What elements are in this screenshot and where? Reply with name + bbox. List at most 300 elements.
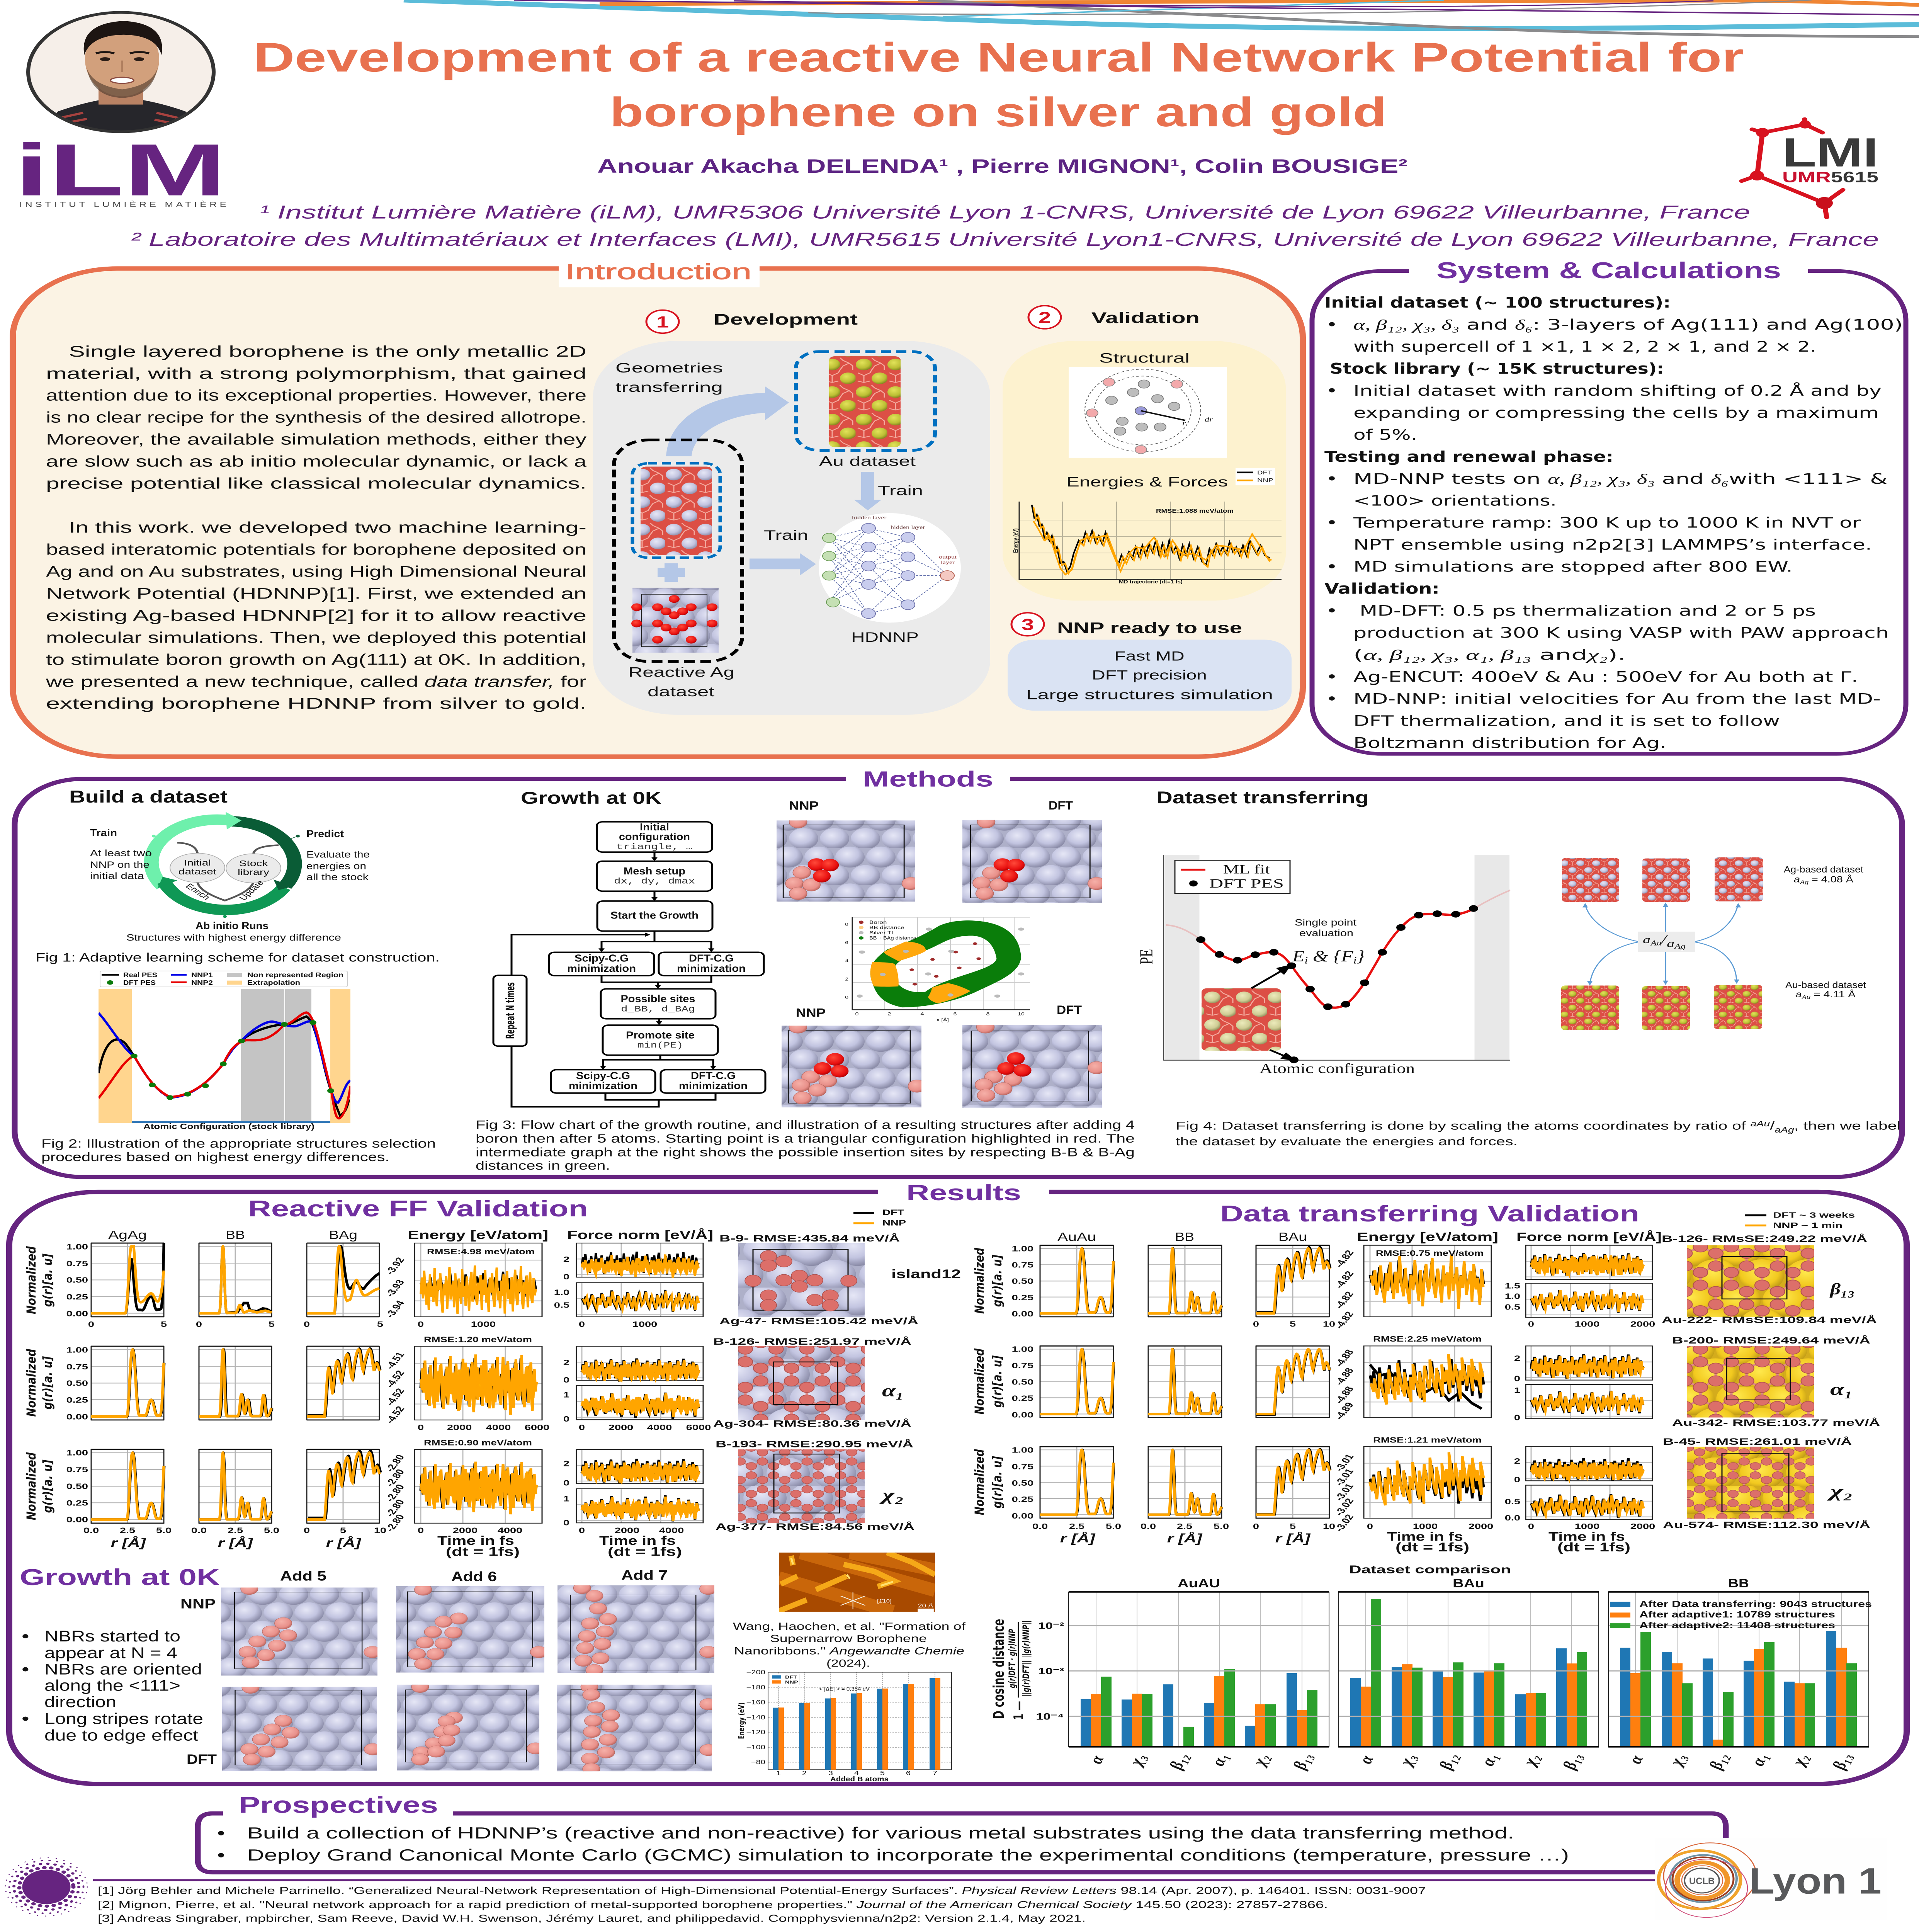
chart row: data transfer, chi2: 1000 [1575,1522,1599,1531]
affiliations: ² Laboratoire des Multimatériaux et Interfaces (LMI), UMR5615 Université Lyon1-CNRS, Université de Lyon 69622 Villeurbanne, France [131,229,1879,250]
chart row: data transfer, chi2: 0.25 [1012,1495,1033,1504]
axis labels: (dt = 1fs) [1395,1541,1469,1554]
axis labels: r [Å] [111,1536,146,1550]
panel: NNP benefits: Large structures simulation [1026,687,1273,702]
y axis label: 10⁻² [1038,1621,1064,1631]
chart row: reactive FF, chi2: 0 [418,1526,424,1535]
chart row: reactive FF, chi2: 0.0 [83,1526,99,1535]
arrow: train down: Train [878,483,923,498]
sub-heading: dataset transferring: Dataset transferring [1156,788,1369,807]
bar chart: energy vs added B atoms: −180 [746,1684,765,1691]
chart row: data transfer, chi2: 2.5 [1069,1522,1084,1531]
chart row: reactive FF, chi2: 0.0 [191,1526,207,1535]
chart row: reactive FF, chi2: 2.5 [120,1526,135,1535]
introduction body text: are slow such as ab initio molecular dynamic, or lack a [46,453,587,470]
legend [770,1674,799,1685]
chart row: data transfer, beta13: 0 [1528,1320,1534,1328]
bar chart: energy vs added B atoms: 3 [828,1770,833,1777]
chart row: data transfer, chi2: 0 [1514,1475,1520,1484]
body text: NPT ensemble using n2p2[3] LAMMPS’s interface. [1353,536,1872,553]
heading: methods: Methods [863,767,993,791]
atomistic structure: island12 on Ag: B-9- RMSE:435.84 meV/Å [719,1233,900,1244]
chart row: reactive FF, alpha1: 2 [563,1358,569,1367]
chart row: reactive FF, island12: 0 [304,1320,310,1329]
introduction body text: existing Ag-based HDNNP[2] for it to allow reactive [46,607,586,624]
legend: BB + BAg distance [869,936,916,941]
axis labels: Time in fs [1387,1530,1463,1544]
axis labels: Time in fs [437,1534,514,1548]
flow chart: growth routine: min(PE) [637,1041,683,1050]
chart row: data transfer, chi2: 0 [1528,1522,1534,1531]
bar chart: energy vs added B atoms: 2 [802,1770,807,1777]
atomistic structure: chi2 on Ag [716,1439,914,1532]
chart row: reactive FF, alpha1: RMSE:1.20 meV/atom [424,1335,532,1344]
chart row: reactive FF, island12: -3.93 [383,1278,407,1298]
bullet text: growth observations: NBRs are oriented [44,1661,202,1678]
body text: • [1326,514,1338,531]
chart row: data transfer, beta13: 1.00 [1012,1244,1033,1253]
atomistic structure: island12 on Ag: Ag-47- RMSE:105.42 meV/Å [719,1316,918,1327]
arrows to the curve [1251,966,1294,1060]
data transfer thumbnails and scaling diagram: Ag-based dataset [1784,864,1863,874]
flow chart: growth routine: triangle, … [616,842,693,852]
legend [1175,861,1290,893]
panel chart: BB [1608,1577,1872,1772]
chart row: reactive FF, chi2: 0 [304,1526,310,1535]
introduction body text: precise potential like classical molecular dynamics. [46,475,586,492]
chart row: reactive FF, alpha1: Normalized [24,1349,39,1417]
chart: possible insertion sites map: 10 [1018,1011,1025,1016]
bar chart: energy vs added B atoms: −120 [746,1729,765,1736]
chart row: data transfer, alpha1: Normalized [972,1348,987,1415]
introduction body text [46,343,587,712]
panel chart: AuAU: α₁ [1208,1752,1232,1768]
column titles: reactive FF [108,1228,713,1242]
affiliations [131,202,1879,250]
body text: Temperature ramp: 300 K up to 1000 K in NVT or [1353,514,1861,531]
sub-heading: reactive FF validation: Reactive FF Validation [248,1196,588,1221]
image: STM of borophene nanoribbons: 20 Å [918,1602,933,1609]
caption: figure 4: , then we label [1794,1119,1900,1132]
flow chart: growth routine: Scipy-C.G [575,953,629,964]
atomistic structure: beta13 on Au: Au-222- RMsSE:109.84 meV/Å [1662,1315,1877,1325]
caption: figure 4: aAu [1751,1120,1770,1128]
decorative header swooshes [404,0,1919,37]
chart row: data transfer, chi2: RMSE:1.21 meV/atom [1373,1436,1482,1444]
flow chart: growth routine: dx, dy, dmax [614,876,695,886]
legend: NNP [1257,477,1273,483]
atomistic structure: alpha1 on Ag: α₁ [882,1381,904,1400]
body text: of 5%. [1353,426,1417,443]
bar chart: energy vs added B atoms: −160 [746,1699,765,1706]
column titles: data transferring: Energy [eV/atom] [1357,1230,1498,1244]
bar chart: dataset comparison [990,1564,1872,1772]
body text: MD-NNP tests on α, β₁₂, χ₃, δ₃ and δ₆with <111> & [1353,470,1887,487]
data transfer thumbnails and scaling diagram: Ag [1800,879,1809,885]
legend: DFT PES [1209,876,1284,890]
chart: PES with ML fit and DFT points: i [1304,955,1308,966]
chart: PES with ML fit and DFT points: i [1353,955,1356,966]
body text: Ag-ENCUT: 400eV & Au : 500eV for Au both at Γ. [1353,668,1858,685]
chart row: data transfer, alpha1: g(r)[a. u] [990,1355,1005,1408]
Au dataset structure [796,352,935,451]
bar chart: energy vs added B atoms [738,1669,952,1783]
y axis label: 1 — [1011,1701,1026,1720]
chart row: data transfer, beta13: 0.00 [1012,1310,1033,1318]
body text: DFT thermalization, and it is set to follow [1353,713,1780,729]
chart row: data transfer, chi2: 2.5 [1177,1522,1192,1531]
chart row: data transfer, alpha1 [972,1335,1652,1422]
chart row: reactive FF, alpha1: 0 [579,1423,585,1432]
body text: Validation: [1324,580,1440,597]
bar chart: dataset comparison: Dataset comparison [1349,1564,1511,1576]
axis labels [1060,1530,1630,1554]
atomistic structure: chi2 on Au: B-45- RMSE:261.01 meV/Å [1663,1437,1852,1447]
image: STM of borophene nanoribbons: [1̄10] [877,1599,892,1604]
label: Au dataset: Au dataset [819,454,916,469]
chart row: reactive FF, alpha1: -4.52 [383,1387,407,1407]
title [253,34,1744,135]
adaptive learning cycle diagram [90,812,370,943]
chart: possible insertion sites map: 4 [921,1011,924,1016]
chart: possible insertion sites map: 8 [845,922,848,927]
flow chart: growth routine: configuration [619,831,690,842]
chart row: reactive FF, alpha1: 6000 [686,1423,711,1432]
chart row: data transfer, beta13: 0 [1253,1320,1259,1328]
column titles: reactive FF: Force norm [eV/Å] [567,1228,713,1242]
flow chart: growth routine: Promote site [626,1029,695,1041]
chart row: reactive FF, island12: 0.00 [66,1309,88,1318]
body text: MD simulations are stopped after 800 EW. [1353,558,1793,575]
chart row: reactive FF, chi2: 0 [579,1526,585,1535]
bullet text: growth observations: Long stripes rotate [44,1710,203,1728]
line chart: energies [1012,502,1282,585]
caption: figure 3: Fig 3: Flow chart of the growth routine, and illustration of a resulting structures after adding 4 [476,1118,1135,1132]
chart row: reactive FF, island12: 1000 [471,1320,496,1329]
HDNNP network diagram: hidden layer [852,515,887,520]
chart row: reactive FF, island12: Normalized [24,1246,39,1314]
chart row: data transfer, beta13: 1000 [1575,1320,1599,1328]
citation: Wang et al.: Wang, Haochen, et al. "Formation of [733,1621,966,1632]
introduction body text: to stimulate boron growth on Ag(111) at 0K. In addition, [46,651,586,668]
introduction body text: is no clear recipe for the synthesis of the desired allotrope. [46,409,586,426]
column titles: reactive FF: BAg [329,1228,357,1242]
panel chart: BAu: χ₃ [1395,1752,1420,1769]
bar chart: energy vs added B atoms: < |ΔE| > = 0.354 eV [819,1685,870,1692]
snapshots: Add 5, Add 6, Add 7 for NNP and DFT: DFT [187,1752,217,1767]
chart row: data transfer, alpha1: -4.88 [1333,1348,1356,1368]
atomistic structure: beta13 on Au [1662,1234,1877,1325]
chart row: data transfer, beta13: 0.50 [1012,1277,1033,1286]
chart row: data transfer, beta13: 5 [1290,1320,1296,1328]
chart row: reactive FF, chi2: 5.0 [156,1526,172,1535]
column titles: reactive FF: BB [226,1228,245,1242]
bullet list: Build a collection of HDNNP’s (reactive and non-reactive) for various metal substrates using the data transferring method. [247,1824,1514,1842]
step 2 heading: validation: Validation [1091,310,1200,327]
body text: expanding or compressing the cells by a maximum [1353,404,1879,421]
introduction body text: attention due to its exceptional properties. However, there [46,387,586,404]
logo: LMI UMR5615 [1742,119,1878,218]
panel: validation: Energies & Forces [1066,474,1228,490]
chart: possible insertion sites map: 0 [845,995,848,1000]
column titles: data transferring: Force norm [eV/Å] [1516,1230,1662,1244]
chart row: reactive FF, island12: 1000 [632,1320,657,1329]
atomistic structure: alpha1 on Ag: Ag-304- RMSE:80.36 meV/Å [713,1418,911,1429]
chart row: data transfer, chi2 [972,1436,1655,1554]
bar chart: energy vs added B atoms: 7 [933,1770,937,1777]
step 1 heading: development [646,310,858,333]
bullet list [217,1824,1569,1864]
HDNNP network diagram: HDNNP [851,630,919,645]
bullet text: growth observations: • [22,1661,29,1678]
panel chart: BAu: α₁ [1477,1752,1502,1768]
atomistic structure: beta13 on Au: B-126- RMsSE:249.22 meV/Å [1662,1234,1867,1244]
legend [1236,468,1275,485]
chart row: data transfer, beta13: -4.82 [1333,1290,1356,1310]
atomistic snapshots: growth at 0K NNP and DFT: DFT [1057,1003,1082,1017]
adaptive learning cycle diagram: Structures with highest energy difference [126,932,341,943]
chart row: data transfer, beta13: -4.82 [1333,1310,1356,1330]
chart row: reactive FF, alpha1: 4000 [486,1423,511,1432]
heading: prospectives: Prospectives [239,1792,438,1818]
bar chart: energy vs added B atoms: 5 [880,1770,885,1777]
panel: prospectives [198,1792,1726,1872]
caption: figure 3: boron then after 5 atoms. Starting point is a triangular configuration highlighted in red. The [476,1132,1135,1146]
adaptive learning cycle diagram: At least two [90,848,152,859]
chart row: reactive FF, alpha1 [24,1335,711,1432]
RDF schematic: r [1182,419,1186,427]
introduction body text: we presented a new technique, called data transfer, for [46,673,586,690]
data transfer thumbnails and scaling diagram: Au [1650,939,1662,947]
chart: possible insertion sites map: 4 [845,958,848,963]
y axis label: D cosine distance [990,1619,1007,1719]
sub-heading: growth at 0K results: Growth at 0K [20,1565,220,1590]
body text: • [1326,382,1338,399]
line chart: energies: Energy (eV) [1012,529,1019,553]
bullet text: growth observations: appear at N = 4 [44,1645,177,1662]
chart: possible insertion sites map: 2 [845,976,848,981]
chart row: reactive FF, chi2: g(r)[a. u] [40,1459,55,1513]
flow chart: growth routine: minimization [567,963,636,974]
chart row: reactive FF, island12: 1.0 [554,1288,569,1297]
atomistic structure: alpha1 on Au: α₁ [1830,1380,1853,1399]
affiliations: ¹ Institut Lumière Matière (iLM), UMR5306 Université Lyon 1-CNRS, Université de Lyon 69622 Villeurbanne, France [260,202,1750,223]
chart row: reactive FF, alpha1: -4.52 [383,1369,407,1389]
chart: PES with ML fit and DFT points: Atomic configuration [1260,1061,1415,1076]
sub-heading: build a dataset: Build a dataset [69,787,228,806]
chart row: reactive FF, alpha1: 0.75 [66,1362,88,1371]
chart row: data transfer, chi2: 5.0 [1106,1522,1121,1531]
chart row: reactive FF, chi2: 2.5 [228,1526,243,1535]
arrow: curved transfer arrow [666,386,789,456]
bullet text: growth observations: NBRs started to [44,1628,180,1645]
legend: Extrapolation [247,979,300,986]
atomistic structure: chi2 on Ag: χ₂ [879,1485,904,1504]
panel chart: BB: β₁₃ [1828,1751,1856,1772]
logo: purple dotted circle [5,1858,87,1916]
bullet list: Deploy Grand Canonical Monte Carlo (GCMC) simulation to incorporate the experimental conditions (temperature, pressure …) [247,1846,1569,1864]
chart row: reactive FF, alpha1: 6000 [525,1423,549,1432]
flow chart: growth routine: minimization [677,963,746,974]
chart row: data transfer, chi2: 0.75 [1012,1462,1033,1471]
logo: UCBL Lyon 1 [1655,1838,1887,1920]
bullet text: growth observations: direction [44,1694,116,1711]
panel: results [9,1180,1907,1784]
chart row: reactive FF, chi2 [24,1439,703,1559]
body text: (α, β₁₂, χ₃, α₁, β₁₃ and χ₂). [1353,646,1626,663]
adaptive learning cycle diagram: Train [90,827,117,838]
chart row: reactive FF, island12: g(r)[a. u] [40,1253,55,1307]
step 3 heading: NNP ready to use [1011,613,1242,636]
atomistic structure: alpha1 on Au: B-200- RMSE:249.64 meV/Å [1672,1335,1870,1346]
data transfer thumbnails and scaling diagram: / [1661,932,1668,946]
chart: PES with ML fit and DFT points [1137,855,1510,1076]
chart row: data transfer, alpha1: 1 [1514,1386,1520,1395]
chart row: data transfer, chi2: g(r)[a. u] [990,1456,1005,1508]
legend: DFT and NNP: NNP [882,1219,906,1227]
chart row: reactive FF, chi2: -2.80 [383,1483,407,1503]
label: geometries transferring: Geometries [615,361,723,376]
data transfer thumbnails and scaling diagram [1561,857,1866,1030]
reactive Ag dataset group [614,440,742,699]
adaptive learning cycle diagram: NNP on the [90,859,150,870]
legend: DFT 3 weeks and NNP 1 min: NNP ~ 1 min [1773,1221,1843,1230]
data transfer thumbnails and scaling diagram: Ag [1674,942,1686,950]
chart row: data transfer, chi2: 2 [1514,1457,1520,1466]
chart row: reactive FF, chi2: 0 [563,1478,569,1487]
adaptive learning cycle diagram: initial data [90,871,144,881]
chart row: data transfer, beta13: 0.25 [1012,1293,1033,1302]
body text: Boltzmann distribution for Ag. [1353,735,1666,751]
RDF schematic: dr [1205,415,1213,423]
introduction body text: based interatomic potentials for borophene deposited on [46,541,586,558]
adaptive learning cycle diagram: library [238,867,269,877]
chart row: data transfer, beta13: g(r)[a. u] [990,1255,1005,1307]
axis labels: Time in fs [1548,1530,1625,1544]
chart row: reactive FF, alpha1: 1 [563,1390,569,1399]
adaptive learning cycle diagram: energies on [306,861,366,871]
bullet list: • [217,1846,225,1864]
bar chart: energy vs added B atoms: −100 [746,1744,765,1751]
panel chart: BAu [1338,1577,1599,1772]
step 2 heading: validation [1028,306,1200,329]
chart row: data transfer, chi2: -3.01 [1333,1482,1356,1502]
chart row: reactive FF, alpha1: -4.52 [383,1405,407,1425]
adaptive learning cycle diagram: Predict [306,828,344,840]
chart row: reactive FF, chi2: 5.0 [264,1526,279,1535]
body text: • [1326,602,1338,619]
data transfer thumbnails and scaling diagram: a [1667,937,1674,949]
caption: figure 2: procedures based on highest energy differences. [41,1150,389,1164]
chart row: data transfer, alpha1: RMSE:2.25 meV/atom [1373,1335,1482,1344]
chart row: data transfer, chi2: 0 [1367,1522,1373,1531]
data transfer thumbnails and scaling diagram: = 4.08 Å [1809,874,1853,884]
chart row: data transfer, chi2: -3.02 [1333,1513,1356,1533]
chart: possible insertion sites map [845,917,1030,1022]
citation: Wang et al.: Supernarrow Borophene [770,1633,927,1644]
legend: DFT and NNP [853,1208,906,1227]
panel chart: BAu: β₁₂ [1435,1751,1462,1772]
snapshots: Add 5, Add 6, Add 7 for NNP and DFT: Add 5 [280,1569,326,1584]
chart row: reactive FF, alpha1: 0.00 [66,1412,88,1421]
legend: Real PES [123,971,157,979]
caption: figure 4: aAg [1775,1126,1794,1134]
atomistic structure: chi2 on Ag: B-193- RMSE:290.95 meV/Å [716,1439,913,1449]
adaptive learning cycle diagram: Update [237,879,266,902]
chart row: data transfer, chi2: 5 [1290,1522,1296,1531]
chart row: reactive FF, chi2: 0.00 [66,1515,88,1524]
chart row: reactive FF, island12 [24,1242,703,1329]
logo: LMI UMR5615: LMI [1782,130,1878,175]
chart row: reactive FF, chi2: RMSE:0.90 meV/atom [424,1439,532,1447]
axis labels: r [Å] [218,1536,253,1550]
adaptive learning cycle diagram: Initial [184,858,211,867]
chart row: reactive FF, chi2: 10 [374,1526,386,1535]
chart row: reactive FF, island12: -3.94 [383,1299,407,1319]
flow chart: growth routine: Initial [640,821,669,833]
adaptive learning cycle diagram: Evaluate the [306,849,370,860]
panel chart: AuAU: β₁₂ [1165,1751,1193,1772]
chart row: reactive FF, chi2: 2000 [453,1526,478,1535]
chart row: data transfer, alpha1: -4.88 [1333,1385,1356,1405]
chart row: reactive FF, island12: 5 [161,1320,167,1329]
column titles: data transferring: AuAu [1057,1230,1096,1244]
chart row: data transfer, beta13: 1.5 [1505,1281,1520,1290]
caption: figure 3: distances in green. [476,1159,610,1172]
chart row: data transfer, alpha1: -4.88 [1333,1367,1356,1387]
chart row: reactive FF, alpha1: 0 [418,1423,424,1432]
atomistic snapshots: growth at 0K NNP and DFT: NNP [789,799,819,813]
RDF schematic [1069,367,1227,458]
panel: system and calculations [1312,258,1906,754]
logo: iLM: iLM [15,129,226,211]
column titles: reactive FF: AgAg [108,1228,147,1242]
label: geometries transferring: transferring [615,380,723,395]
chart row: data transfer, chi2: 1000 [1413,1522,1438,1531]
chart row: reactive FF, alpha1: -4.51 [383,1350,407,1371]
chart row: data transfer, chi2: 0.00 [1012,1512,1033,1520]
axis labels: r [Å] [1060,1532,1096,1545]
flow chart: growth routine: minimization [679,1080,748,1091]
axis labels: r [Å] [326,1536,362,1550]
chart row: reactive FF, chi2: 1.00 [66,1449,88,1458]
adaptive learning cycle diagram: Enrich [184,882,212,901]
sub-heading: data transferring validation: Data transferring Validation [1220,1201,1639,1226]
arrow: train down [854,472,923,510]
body text: production at 300 K using VASP with PAW approach [1353,624,1889,641]
HDNNP network diagram: layer [941,560,955,565]
chart: possible insertion sites map: 8 [986,1011,990,1016]
chart: possible insertion sites map: 2 [888,1011,891,1016]
panel chart: BB: β₁₂ [1705,1751,1732,1772]
chart row: data transfer, chi2: 1.00 [1012,1446,1033,1455]
bar chart: energy vs added B atoms: Added B atoms [830,1776,889,1783]
chart row: data transfer, alpha1: 1.00 [1012,1345,1033,1354]
flow chart: growth routine: Mesh setup [624,866,685,877]
atomistic snapshots: growth at 0K NNP and DFT: DFT [1049,799,1073,812]
legend: DFT [785,1675,797,1680]
flow chart: growth routine: Start the Growth [610,910,699,921]
chart row: reactive FF, chi2: 2 [563,1459,569,1468]
legend: NNP1 [191,971,213,979]
chart row: data transfer, alpha1: 0.50 [1012,1378,1033,1387]
references: [3] Andreas Singraber, mpbircher, Sam Reeve, David W.H. Swenson, Jérémy Lauret, and philippedavid. Compphysvienna/n2p2: Version 2.1.4, May 2021. [98,1913,1086,1924]
heading: System & Calculations [1436,258,1781,283]
chart: PES with ML fit and DFT points: E [1292,947,1306,965]
atomistic structure: chi2 on Au: χ₂ [1827,1482,1853,1501]
chart row: data transfer, chi2: 0.0 [1505,1514,1520,1522]
arrow: train right: Train [764,528,808,543]
